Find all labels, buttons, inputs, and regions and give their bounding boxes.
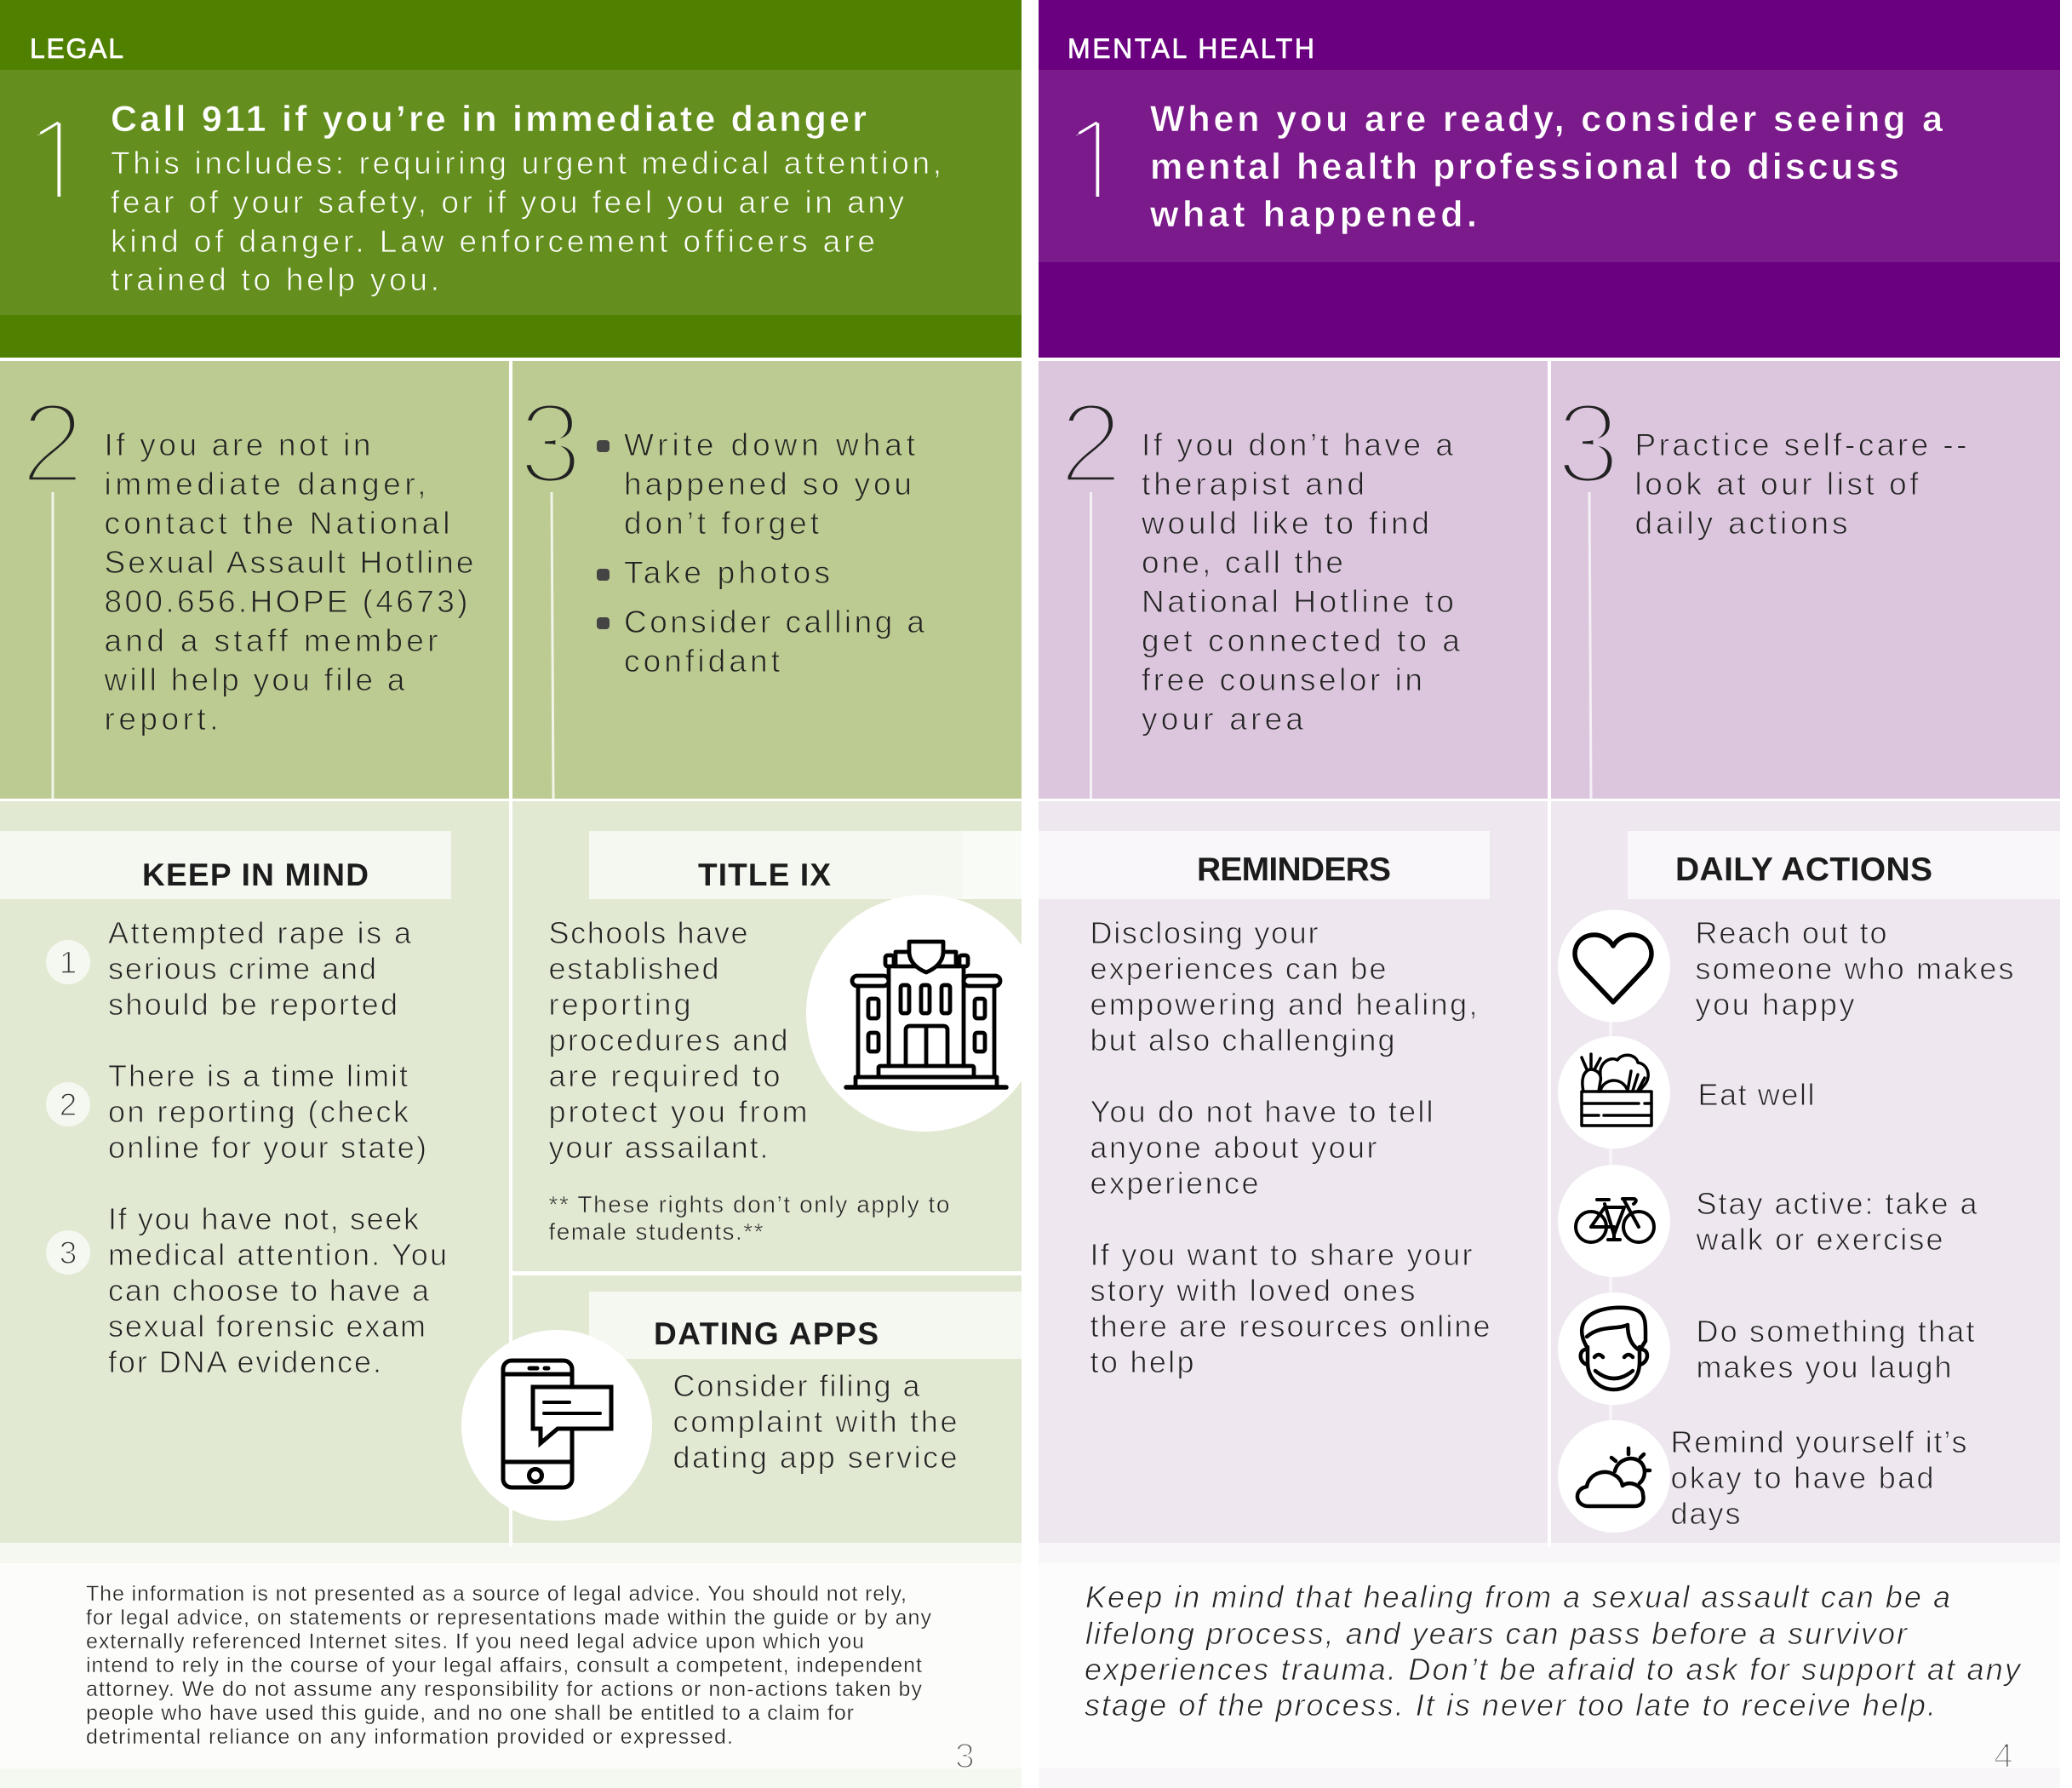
step 2 text: Sexual Assault Hotline [104,545,473,580]
title ix text: protect you from [548,1094,807,1129]
icon: heart [1558,909,1670,1022]
daily actions text: Reach out to [1696,915,1886,950]
numbered badges: 2 [60,1087,77,1122]
heading: keep in mind: KEEP IN MIND [142,857,369,892]
disclaimer text: attorney. We do not assume any responsibility for actions or non-actions taken by [86,1677,923,1701]
reminders text: to help [1090,1344,1193,1379]
disclaimer text: detrimental reliance on any information provided or expressed. [86,1725,733,1749]
daily actions text: you happy [1696,987,1854,1022]
step 3 bullets: Write down what [624,427,916,462]
panel: mental health page [1039,0,2060,1788]
reminders text: experiences can be [1090,951,1386,986]
step 2 text: get connected to a [1142,623,1460,658]
step 3 bullets: don’t forget [624,506,820,541]
section label: mental health: MENTAL HEALTH [1067,33,1314,64]
title ix text: reporting [548,987,691,1022]
title ix text: procedures and [548,1023,788,1057]
icon: sun and cloud [1558,1420,1670,1533]
step number 1 [1076,121,1100,197]
heading: dating apps: DATING APPS [654,1316,879,1351]
reminders panel [1039,801,1548,1543]
disclaimer text: The information is not presented as a source of legal advice. You should not rely, [86,1582,907,1606]
step 2 text: free counselor in [1142,662,1422,697]
closing note panel [1039,1543,2060,1788]
step 2 text: report. [104,702,218,736]
step 3 bullets: Consider calling a [624,605,924,639]
disclaimer text: people who have used this guide, and no one shall be entitled to a claim for [86,1701,854,1725]
daily actions text: makes you laugh [1696,1350,1951,1384]
keep in mind text: serious crime and [108,951,376,986]
panel: legal page [0,0,1043,1788]
keep in mind text: should be reported [108,987,398,1022]
reminders text: story with loved ones [1090,1273,1415,1308]
dating apps panel [512,1275,1022,1543]
daily actions text: okay to have bad [1670,1460,1934,1495]
dating apps text [673,1368,957,1475]
disclaimer text [86,1582,931,1749]
legal steps 2 and 3 panel [0,361,1022,799]
title ix text: Schools have [548,915,747,950]
keep in mind text: sexual forensic exam [108,1309,426,1344]
reminders text [1090,915,1490,1379]
closing note text: experiences trauma. Don’t be afraid to ask for support at any [1085,1652,2022,1687]
step 2 text [1141,427,1460,736]
step 1 heading: When you are ready, consider seeing a [1150,99,1943,140]
keep in mind panel [0,801,509,1543]
daily actions text: Stay active: take a [1696,1186,1978,1221]
step 1 text: fear of your safety, or if you feel you are in any [111,185,904,220]
step number 3: 3 [518,379,582,507]
page number 3: 3 [955,1736,975,1775]
step 3 text: look at our list of [1634,467,1919,501]
numbered badges [46,940,90,1275]
daily actions panel [1551,801,2060,1543]
keep in mind text: online for your state) [108,1130,426,1165]
keep in mind text: for DNA evidence. [108,1344,381,1379]
daily actions text: someone who makes [1696,951,2014,986]
step 2 text: your area [1142,702,1303,736]
disclaimer text: for legal advice, on statements or representations made within the guide or by any [86,1606,931,1630]
step 1 text: This includes: requiring urgent medical attention, [111,146,942,181]
title ix text: are required to [548,1058,780,1093]
closing note text [1085,1579,2022,1722]
step 2 text: therapist and [1142,467,1365,501]
keep in mind text: If you have not, seek [108,1201,420,1236]
section label: legal: LEGAL [30,33,123,64]
dating apps text: complaint with the [673,1404,957,1439]
mental health header panel [1039,0,2060,358]
reminders text: experience [1090,1166,1258,1201]
reminders text: empowering and healing, [1090,987,1478,1022]
icon: vegetable crate [1558,1036,1670,1149]
step 1 text [111,99,942,297]
heading: title ix: TITLE IX [698,857,831,892]
step 1 heading: what happened. [1149,194,1477,235]
title ix text: your assailant. [548,1130,768,1165]
reminders text: but also challenging [1090,1023,1394,1057]
step 1 heading [1149,99,1943,235]
title ix text: established [548,951,718,986]
page number 4: 4 [1994,1736,2013,1775]
disclaimer text: externally referenced Internet sites. If you need legal advice upon which you [86,1630,864,1653]
numbered badges: 3 [60,1235,77,1270]
step 2 text: National Hotline to [1142,584,1454,619]
legal disclaimer panel [0,1543,1022,1788]
disclaimer text: intend to rely in the course of your legal affairs, consult a competent, independent [86,1653,922,1677]
title ix panel [512,801,1043,1271]
daily actions text: Eat well [1697,1077,1815,1112]
daily actions text: days [1670,1496,1740,1531]
reminders text: there are resources online [1090,1309,1490,1344]
step 3 text: daily actions [1634,506,1847,541]
step number 1: 1 [21,91,92,234]
step number 2: 2 [1059,379,1123,507]
closing note text: lifelong process, and years can pass before a survivor [1085,1616,1909,1651]
step 1 text: kind of danger. Law enforcement officers are [111,224,875,259]
step 2 text: 800.656.HOPE (4673) [104,584,468,619]
icon: smiling face [1558,1292,1670,1405]
title ix text [548,915,807,1165]
legal header panel [0,0,1022,358]
closing note text: Keep in mind that healing from a sexual assault can be a [1085,1579,1950,1614]
footnote: ** These rights don’t only apply to [548,1191,950,1218]
step 3 bullets [597,427,924,679]
step 3 bullets: happened so you [624,467,912,501]
icon: phone with message [461,1330,652,1521]
step 1 text: trained to help you. [111,262,439,297]
dating apps text: dating app service [673,1440,957,1475]
step 2 text: If you don’t have a [1142,427,1453,462]
keep in mind text: on reporting (check [108,1094,409,1129]
step number 3: 3 [1556,379,1620,507]
keep in mind text: There is a time limit [108,1058,408,1093]
step 1 heading: mental health professional to discuss [1150,146,1899,187]
keep in mind text [108,915,447,1379]
heading: daily actions: DAILY ACTIONS [1675,851,1932,888]
step 3 text [1634,427,1966,541]
heading: reminders: REMINDERS [1197,851,1391,888]
mental health steps 2 and 3 panel [1039,361,2060,799]
reminders text: You do not have to tell [1090,1094,1434,1129]
numbered badges: 1 [60,945,77,980]
step 2 text: contact the National [104,506,449,541]
dating apps text: Consider filing a [673,1368,920,1403]
step number 1 [37,121,61,197]
step 2 text: would like to find [1141,506,1429,541]
reminders text: Disclosing your [1090,915,1318,950]
reminders text: anyone about your [1090,1130,1377,1165]
step 2 text: If you are not in [104,427,371,462]
daily actions text [1670,915,2014,1531]
keep in mind text: Attempted rape is a [108,915,412,950]
keep in mind text: can choose to have a [108,1273,430,1308]
step 2 text: and a staff member [104,623,438,658]
keep in mind text: medical attention. You [108,1237,447,1272]
footnote: female students.** [548,1218,764,1245]
footnote [548,1191,950,1245]
step 2 text: one, call the [1142,545,1343,580]
icon: bicycle [1558,1165,1670,1277]
step number 1: 1 [1060,91,1130,234]
step 3 text: Practice self-care -- [1634,427,1966,462]
step 3 bullets: Take photos [624,555,830,590]
step 2 text: immediate danger, [104,467,426,501]
step 2 text: will help you file a [104,662,405,697]
step 3 bullets: confidant [624,644,781,679]
step 2 text [104,427,473,736]
reminders text: If you want to share your [1090,1237,1473,1272]
daily actions text: Remind yourself it’s [1670,1424,1966,1459]
icon: school building [806,895,1043,1132]
daily actions text: Do something that [1696,1314,1975,1349]
step number 2: 2 [20,379,84,507]
closing note text: stage of the process. It is never too late to receive help. [1085,1688,1936,1722]
daily actions text: walk or exercise [1696,1222,1943,1257]
step 1 text: Call 911 if you’re in immediate danger [111,99,867,140]
